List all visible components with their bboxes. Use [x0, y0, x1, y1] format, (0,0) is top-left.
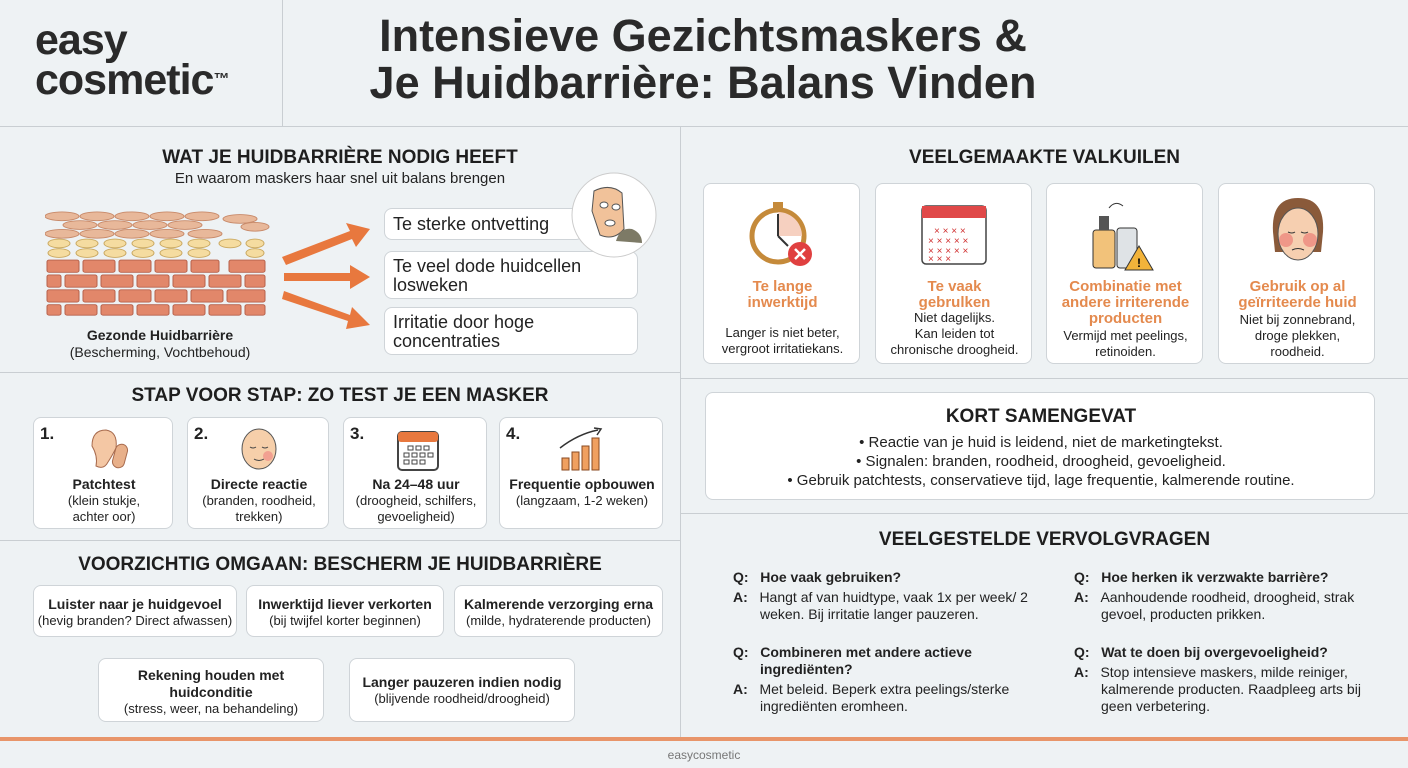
faq 1: A: Hangt af van huidtype, vaak 1x per week/ 2 weken. Bij irritatie langer pauzeren. — [733, 589, 1028, 622]
tip 4: huidconditie — [169, 684, 253, 700]
pitfall 2: × × × × × — [928, 246, 968, 257]
pitfall 3: retinoiden. — [1095, 344, 1156, 359]
tip 5: (blijvende roodheid/droogheid) — [374, 691, 550, 706]
pitfall 3: Vermijd met peelings, — [1063, 328, 1188, 343]
logo — [35, 16, 228, 104]
box: irritatie: Irritatie door hoge — [393, 312, 534, 332]
pitfall 2: gebrulken — [919, 294, 990, 311]
icon: skin barrier bricks — [45, 212, 270, 316]
subheading: En waarom maskers haar snel uit balans brengen — [175, 170, 505, 187]
step 4: (langzaam, 1-2 weken) — [516, 493, 648, 508]
step 1: (klein stukje, — [68, 493, 140, 508]
step 2: (branden, roodheid, — [202, 493, 316, 508]
step 4: 4. — [506, 424, 520, 443]
heading: STAP VOOR STAP: ZO TEST JE EEN MASKER — [132, 385, 548, 406]
step 4 — [499, 417, 663, 529]
faq 4: Q: Wat te doen bij overgevoeligheid? — [1074, 644, 1328, 660]
step 1: 1. — [40, 424, 54, 443]
tip 4: Rekening houden met — [138, 667, 284, 683]
faq 2: Q: Combineren met andere actieve ingrediënten? — [733, 644, 972, 677]
box: dode huidcellen — [384, 251, 638, 299]
faq 2: A: Met beleid. Beperk extra peelings/sterke ingrediënten eromheen. — [733, 681, 1009, 714]
pitfall 2: × × × — [928, 254, 951, 265]
panel: pitfalls — [703, 147, 1375, 364]
tip 4 — [98, 658, 324, 722]
tip 2 — [246, 585, 444, 637]
title: Je Huidbarrière: Balans Vinden — [370, 57, 1036, 108]
tip 3 — [454, 585, 663, 637]
pitfall 2: × × × × — [934, 226, 966, 237]
step 3: 3. — [350, 424, 364, 443]
summary bullets — [787, 434, 1295, 489]
tip 2: Inwerktijd liever verkorten — [258, 596, 432, 612]
pitfall 2 — [875, 183, 1032, 364]
box: ontvetting: Te sterke ontvetting — [393, 214, 549, 234]
pitfall 2: chronische droogheid. — [891, 342, 1018, 357]
panel: careful handling — [33, 552, 663, 722]
box: irritatie — [384, 307, 638, 355]
tip 1 — [33, 585, 237, 637]
pitfall 1 — [703, 183, 860, 364]
panel: FAQ — [733, 529, 1361, 714]
summary bullets: • Gebruik patchtests, conservatieve tijd, lage frequentie, kalmerende routine. — [787, 472, 1295, 489]
pitfall 1: inwerktijd — [747, 294, 818, 311]
pitfall 2: Te vaak — [928, 278, 981, 295]
tip 3: Kalmerende verzorging erna — [464, 596, 653, 612]
pitfall 3: andere irriterende — [1062, 294, 1189, 311]
box: dode huidcellen: losweken — [393, 275, 468, 295]
pitfall 2: Kan leiden tot — [915, 326, 994, 341]
step 1: achter oor) — [73, 509, 135, 524]
pitfall 1: Langer is niet beter, — [725, 325, 840, 340]
pitfall 1: Te lange — [753, 278, 812, 295]
pitfall 4: Gebruik op al — [1250, 278, 1345, 295]
pitfall 4: roodheid. — [1270, 344, 1325, 359]
step 2: Directe reactie — [211, 476, 307, 492]
panel: summary — [705, 392, 1375, 500]
pitfall 2: × × × × × — [928, 236, 968, 247]
icon: mask circle — [572, 172, 656, 258]
panel: barrier needs — [45, 146, 656, 360]
heading: VEELGEMAAKTE VALKUILEN — [909, 147, 1180, 168]
caption: healthy barrier — [70, 327, 250, 360]
tip 1: (hevig branden? Direct afwassen) — [38, 613, 232, 628]
step 2 — [187, 417, 329, 529]
faq 3: Q: Hoe herken ik verzwakte barrière? — [1074, 569, 1328, 585]
logo: cosmetic™ — [35, 56, 228, 104]
caption: healthy barrier: (Bescherming, Vochtbehoud) — [70, 344, 250, 360]
pitfall 4: Niet bij zonnebrand, — [1240, 312, 1355, 327]
summary bullets: • Signalen: branden, roodheid, droogheid, gevoeligheid. — [856, 453, 1226, 470]
faq 2 — [733, 644, 1009, 714]
box: ontvetting — [384, 208, 584, 240]
summary bullets: • Reactie van je huid is leidend, niet de marketingtekst. — [859, 434, 1223, 451]
tip 5 — [349, 658, 575, 722]
tip 2: (bij twijfel korter beginnen) — [269, 613, 421, 628]
pitfall 3: ! — [1137, 256, 1141, 270]
title: Intensieve Gezichtsmaskers & — [379, 10, 1027, 61]
footer: easycosmetic — [668, 748, 740, 762]
step 3: gevoeligheid) — [377, 509, 455, 524]
heading: WAT JE HUIDBARRIÈRE NODIG HEEFT — [162, 147, 518, 168]
pitfall 3: Combinatie met — [1069, 278, 1182, 295]
step 3: Na 24–48 uur — [372, 476, 460, 492]
step 2: 2. — [194, 424, 208, 443]
caption: healthy barrier: Gezonde Huidbarrière — [87, 327, 233, 343]
step 1 — [33, 417, 173, 529]
box: dode huidcellen: Te veel dode huidcellen — [393, 256, 581, 276]
tip 1: Luister naar je huidgevoel — [48, 596, 222, 612]
pitfall 3: producten — [1089, 310, 1162, 327]
box: irritatie: concentraties — [393, 331, 500, 351]
pitfall 1: vergroot irritatiekans. — [722, 341, 843, 356]
step 2: trekken) — [236, 509, 282, 524]
heading: KORT SAMENGEVAT — [946, 406, 1136, 427]
step 3 — [343, 417, 487, 529]
panel: steps — [33, 385, 663, 529]
tip 4: (stress, weer, na behandeling) — [124, 701, 298, 716]
step 4: Frequentie opbouwen — [509, 476, 655, 492]
pitfall 3 — [1046, 183, 1203, 364]
pitfall 2: Niet dagelijks. — [914, 310, 995, 325]
pitfall 4: droge plekken, — [1255, 328, 1340, 343]
step 3: (droogheid, schilfers, — [356, 493, 476, 508]
faq 3 — [1074, 569, 1354, 622]
step 1: Patchtest — [72, 476, 136, 492]
pitfall 4: geïrriteerde huid — [1238, 294, 1357, 311]
title — [370, 10, 1036, 108]
heading: VOORZICHTIG OMGAAN: BESCHERM JE HUIDBARRIÈRE — [78, 554, 602, 575]
faq 1 — [733, 569, 1028, 622]
faq 1: Q: Hoe vaak gebruiken? — [733, 569, 901, 585]
heading: VEELGESTELDE VERVOLGVRAGEN — [879, 529, 1210, 550]
arrows — [282, 223, 370, 329]
tip 3: (milde, hydraterende producten) — [466, 613, 651, 628]
faq 3: A: Aanhoudende roodheid, droogheid, strak gevoel, producten prikken. — [1074, 589, 1354, 622]
faq 4: A: Stop intensieve maskers, milde reiniger, kalmerende producten. Raadpleeg arts bij geen verbetering. — [1074, 664, 1361, 714]
tip 5: Langer pauzeren indien nodig — [362, 674, 562, 690]
logo: easy — [35, 16, 127, 64]
pitfall 4 — [1218, 183, 1375, 364]
